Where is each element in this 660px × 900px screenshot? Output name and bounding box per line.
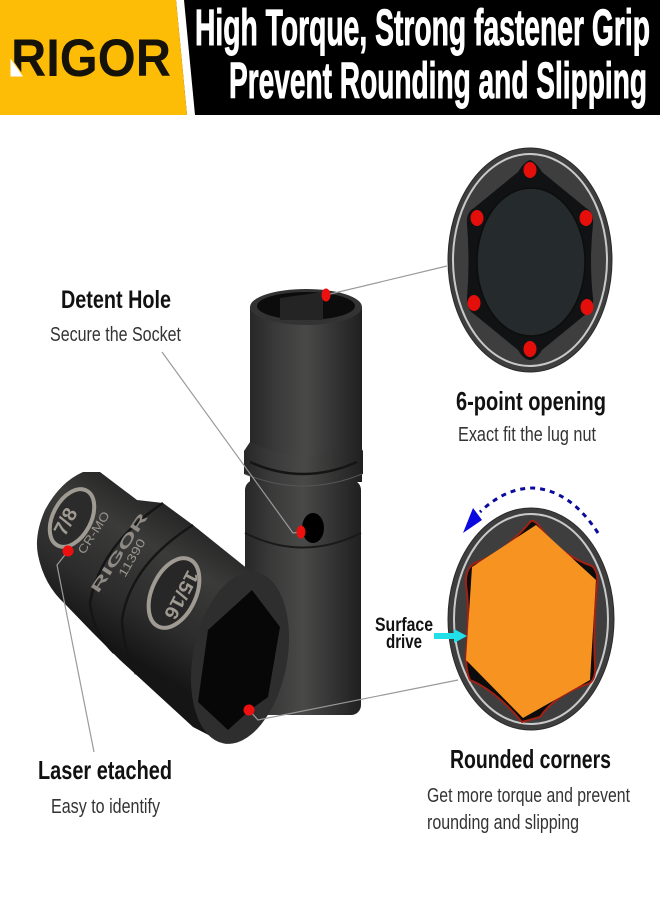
yellow logo panel xyxy=(0,0,187,115)
text: Exact fit the lug nut: Exact fit the lug nut xyxy=(458,424,596,446)
title xyxy=(195,0,650,109)
etched number 11390: 11390 xyxy=(115,536,149,580)
text: rounded corners description xyxy=(427,785,630,834)
detent hole xyxy=(302,513,324,543)
socket opening face xyxy=(177,564,303,752)
etched size badge 7/8 xyxy=(41,482,103,554)
red markers xyxy=(62,288,330,716)
orange nut xyxy=(466,525,596,718)
label: Surface drive: drive xyxy=(386,632,422,653)
heading: Laser etached: Laser etached xyxy=(38,755,172,785)
heading: 6-point opening: 6-point opening xyxy=(456,386,606,416)
label: Surface drive: Surface xyxy=(375,615,433,636)
etched size badge 7/8: 7/8 xyxy=(50,504,82,539)
text: rounded corners description: rounding and slipping xyxy=(427,812,579,834)
rotation arrow xyxy=(463,488,598,533)
cyan arrow xyxy=(434,629,467,643)
detail circle: 6-point opening xyxy=(448,148,612,372)
leader lines xyxy=(57,266,458,752)
upright socket xyxy=(244,289,363,715)
collar xyxy=(244,442,363,486)
lying socket xyxy=(37,472,303,752)
logo: RIGOR: RIGOR xyxy=(11,29,171,88)
header banner xyxy=(0,0,660,115)
etched logo RIGOR: RIGOR xyxy=(87,510,151,596)
etched size badge 15/16 xyxy=(138,550,210,636)
text: Easy to identify: Easy to identify xyxy=(51,796,160,818)
hex corner markers xyxy=(468,162,594,357)
heading: Rounded corners: Rounded corners xyxy=(450,744,611,774)
text: Secure the Socket: Secure the Socket xyxy=(50,324,181,346)
heading: Detent Hole: Detent Hole xyxy=(61,286,171,314)
etched size badge 15/16: 15/16 xyxy=(159,567,202,622)
label: Surface drive xyxy=(375,615,433,653)
etched text CR-MO: CR-MO xyxy=(75,509,113,557)
detail circle: rounded corners xyxy=(448,508,614,730)
